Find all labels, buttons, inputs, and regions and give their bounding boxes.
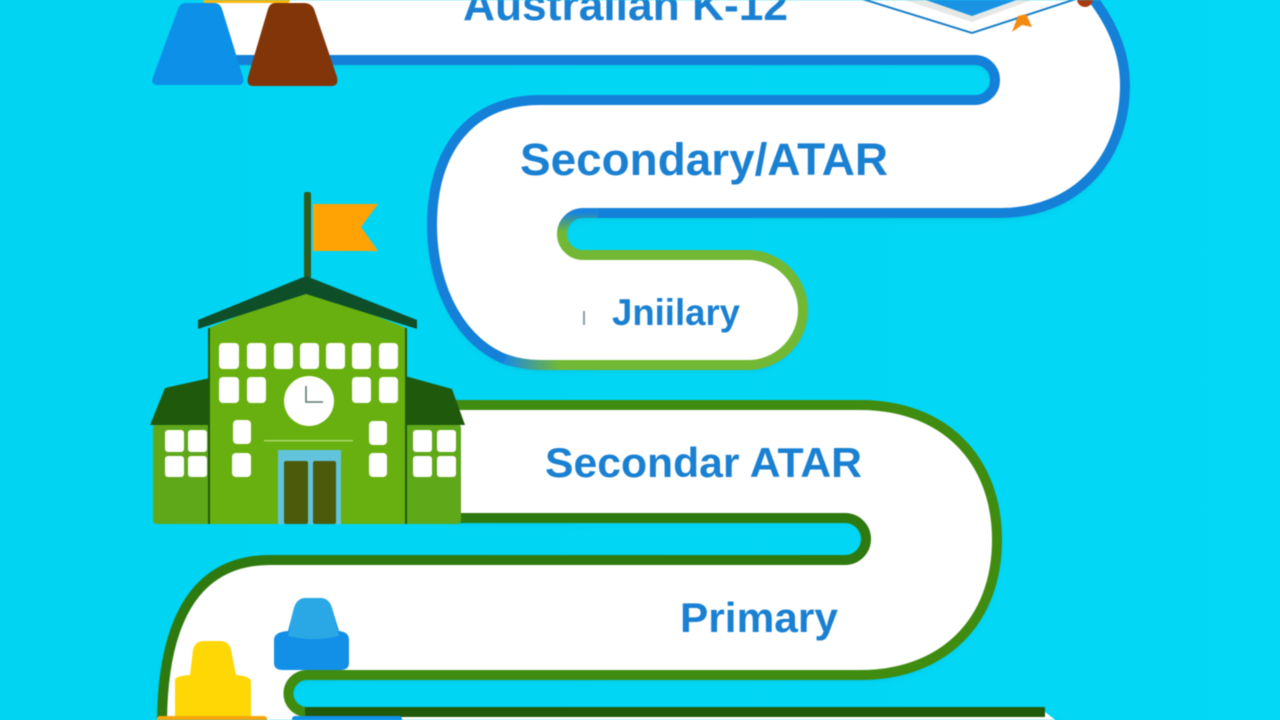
flag <box>313 204 378 251</box>
icon: blue base piece <box>292 716 402 720</box>
label: Secondary/ATAR: Secondary/ATAR <box>520 134 888 185</box>
road: lower section <box>160 405 1062 720</box>
flag pole <box>304 192 311 278</box>
ledge line <box>264 440 353 442</box>
wall edge lines <box>209 328 406 524</box>
mark: small grey tick <box>583 311 585 325</box>
door <box>278 450 341 524</box>
upper windows <box>165 343 456 477</box>
label: Jniilary: Jniilary <box>612 292 740 333</box>
icon: yellow game piece <box>157 641 267 720</box>
label: Primary: Primary <box>680 594 839 641</box>
icon: school building <box>150 192 465 524</box>
icon: game pieces top <box>152 0 337 86</box>
road: upper section <box>215 0 1125 365</box>
main building <box>209 288 406 524</box>
icon: blue game piece <box>274 598 349 670</box>
label: Secondar ATAR: Secondar ATAR <box>545 439 862 486</box>
wing roof right <box>405 376 465 425</box>
wing roof left <box>150 378 210 425</box>
side wing left <box>153 424 213 524</box>
clock <box>284 376 334 426</box>
main roof <box>198 276 417 329</box>
side wing right <box>403 424 461 524</box>
icon: graduation cap <box>856 0 1093 33</box>
